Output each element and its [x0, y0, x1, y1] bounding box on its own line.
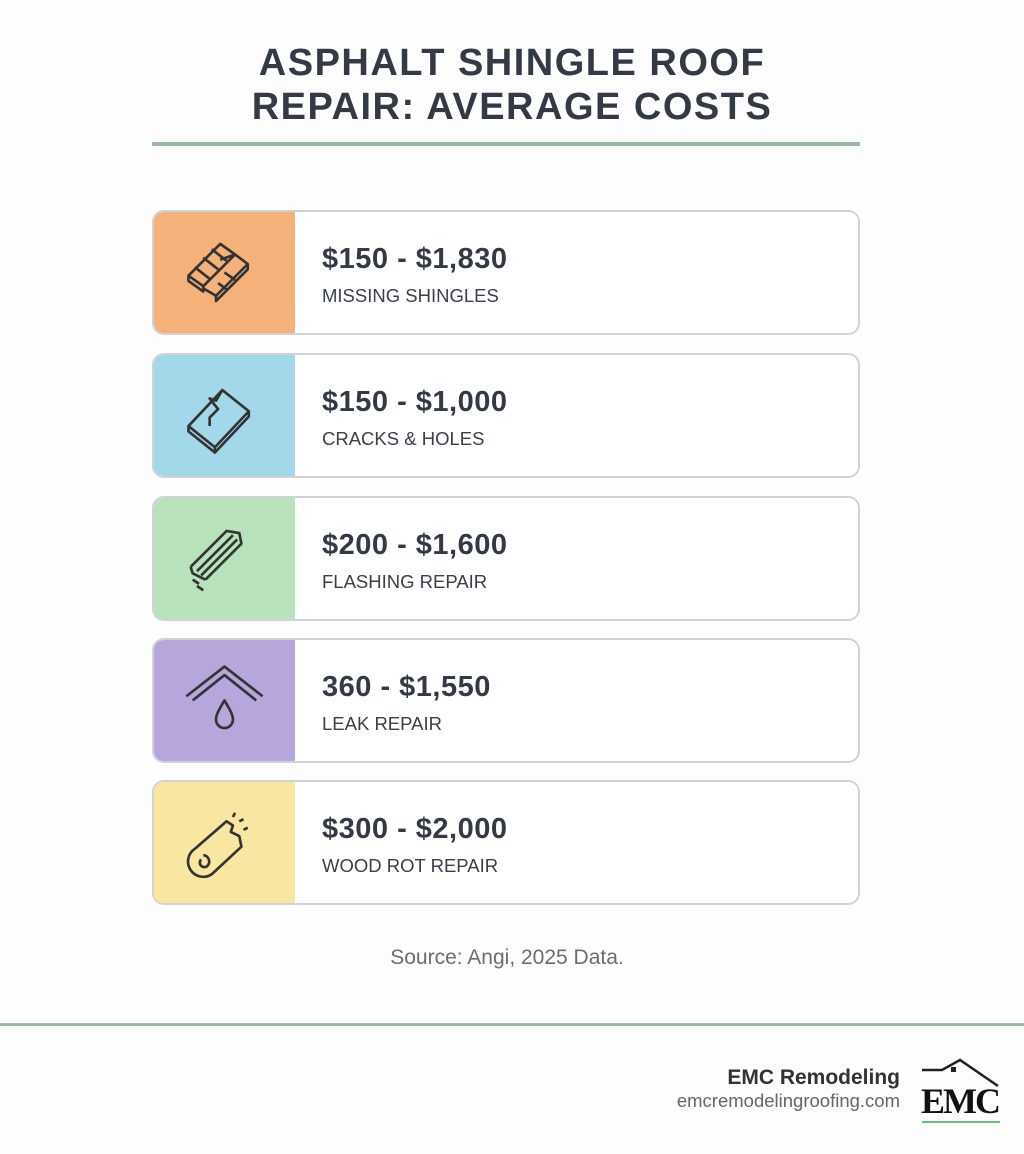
logo: EMC	[921, 1081, 999, 1121]
card: flashing: $200 - $1,600	[322, 529, 507, 561]
card: missing shingles: MISSING SHINGLES	[322, 285, 499, 306]
footer brand text: emcremodelingroofing.com	[677, 1090, 900, 1111]
title: REPAIR: AVERAGE COSTS	[252, 86, 772, 128]
card: leak: LEAK REPAIR	[322, 713, 442, 734]
card: cracks	[152, 353, 860, 478]
card: wood rot: WOOD ROT REPAIR	[322, 855, 498, 876]
icon: roof leak	[154, 640, 295, 761]
card: cracks: CRACKS & HOLES	[322, 428, 484, 449]
card: missing shingles: $150 - $1,830	[322, 243, 507, 275]
icon: cracked shingle	[154, 355, 295, 476]
card: wood rot: $300 - $2,000	[322, 813, 507, 845]
card: leak: 360 - $1,550	[322, 671, 491, 703]
card: wood rot	[152, 780, 860, 905]
icon: rotten wood	[154, 782, 295, 903]
card: missing shingles	[152, 210, 860, 335]
card: cracks: $150 - $1,000	[322, 386, 507, 418]
source note: Source: Angi, 2025 Data.	[390, 946, 624, 969]
footer brand text	[677, 1066, 900, 1111]
logo	[921, 1058, 1000, 1123]
title	[252, 42, 772, 128]
icon: shingles	[154, 212, 295, 333]
icon: flashing	[154, 498, 295, 619]
card: flashing: FLASHING REPAIR	[322, 571, 487, 592]
card: flashing	[152, 496, 860, 621]
footer brand text: EMC Remodeling	[727, 1066, 900, 1089]
card: leak	[152, 638, 860, 763]
title: ASPHALT SHINGLE ROOF	[259, 42, 765, 84]
